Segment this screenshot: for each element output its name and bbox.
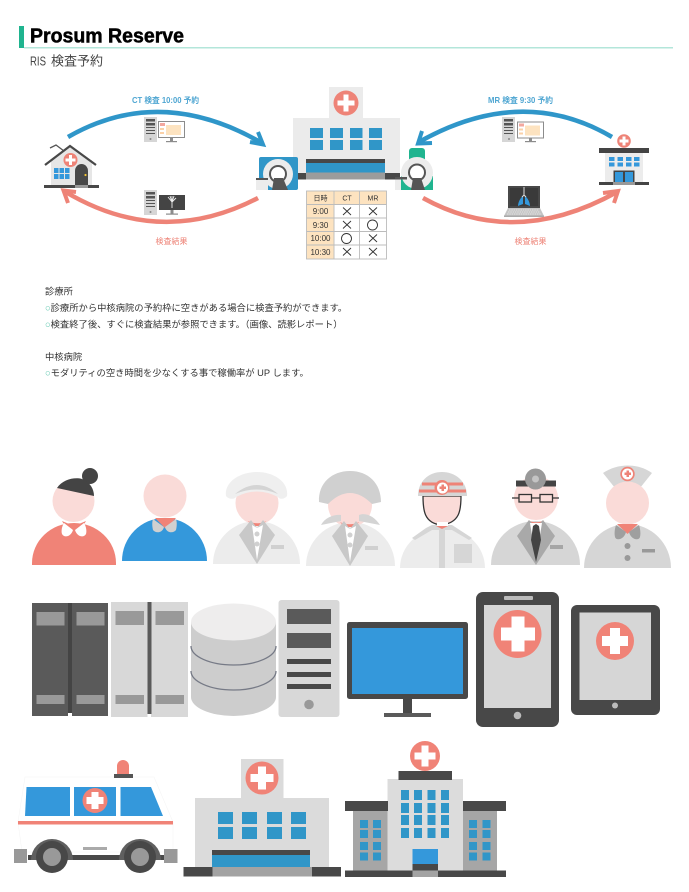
icon: house clinic	[44, 145, 99, 188]
text block: central hospital benefits: ○モダリティの空き時間を少なくする事で稼働率が UP します。	[45, 367, 309, 378]
icon: server tower	[278, 600, 340, 717]
label: result right: 検査結果	[514, 236, 546, 246]
icon: PC with x-ray screen	[144, 190, 185, 215]
text block: clinic benefits: 診療所	[45, 286, 73, 296]
arrow: CT reservation	[68, 112, 263, 144]
icon: nurse	[584, 466, 671, 568]
icon: smartphone	[476, 592, 559, 727]
text block: central hospital benefits: 中核病院	[45, 351, 82, 362]
table: schedule: MR	[368, 196, 378, 202]
label: result left: 検査結果	[156, 236, 188, 246]
table: schedule: CT	[342, 196, 352, 202]
icon: nurse with scarf	[306, 471, 395, 566]
table: schedule: 10:30	[310, 248, 331, 257]
subtitle: RIS	[30, 54, 46, 68]
label: MR reservation: MR 検査 9:30 予約	[488, 95, 553, 105]
icon: ambulance	[14, 760, 178, 873]
text block: central hospital benefits	[45, 351, 309, 378]
table: schedule: 9:00	[313, 207, 329, 216]
title	[19, 26, 673, 48]
icon: male patient	[122, 474, 207, 561]
icon: database	[191, 604, 276, 716]
icon: CT scanner	[256, 157, 298, 190]
icon: doctor	[491, 468, 580, 565]
arrow: MR reservation	[418, 112, 612, 144]
icon: hospital building	[184, 759, 341, 876]
icon: laptop with lungs	[504, 186, 544, 217]
subtitle: 検査予約	[51, 54, 103, 68]
icon: MR scanner	[395, 148, 433, 190]
arrow: CT result	[64, 190, 258, 222]
icon: tablet	[571, 605, 660, 715]
icon: central hospital	[293, 87, 400, 180]
table: schedule: 10:00	[310, 234, 331, 243]
diagram: reservation flow	[44, 87, 649, 259]
text block: clinic benefits	[45, 286, 347, 330]
icon: nurse with white cap	[213, 472, 300, 564]
table: schedule	[306, 191, 386, 259]
icon: light binder	[111, 602, 188, 717]
icon: dark binder	[32, 603, 108, 716]
table: schedule: 日時	[314, 194, 328, 202]
arrow: MR result	[423, 191, 618, 222]
text block: clinic benefits: ○検査終了後、すぐに検査結果が参照できます。（画像、読影レポート）	[45, 318, 343, 330]
title: Prosum Reserve	[30, 26, 184, 48]
table: schedule: 9:30	[313, 221, 329, 230]
icon: female patient	[32, 468, 116, 565]
icon: large hospital	[345, 741, 506, 877]
label: CT reservation: CT 検査 10:00 予約	[132, 95, 199, 105]
icon: paramedic	[400, 472, 485, 568]
icon: clinic building right	[599, 134, 649, 185]
icon: monitor	[347, 622, 468, 717]
icon: PC with reservation screen right	[502, 117, 544, 142]
text block: clinic benefits: ○診療所から中核病院の予約枠に空きがある場合に検査予約ができます。	[45, 302, 347, 313]
icon: PC with reservation screen left	[144, 117, 184, 142]
